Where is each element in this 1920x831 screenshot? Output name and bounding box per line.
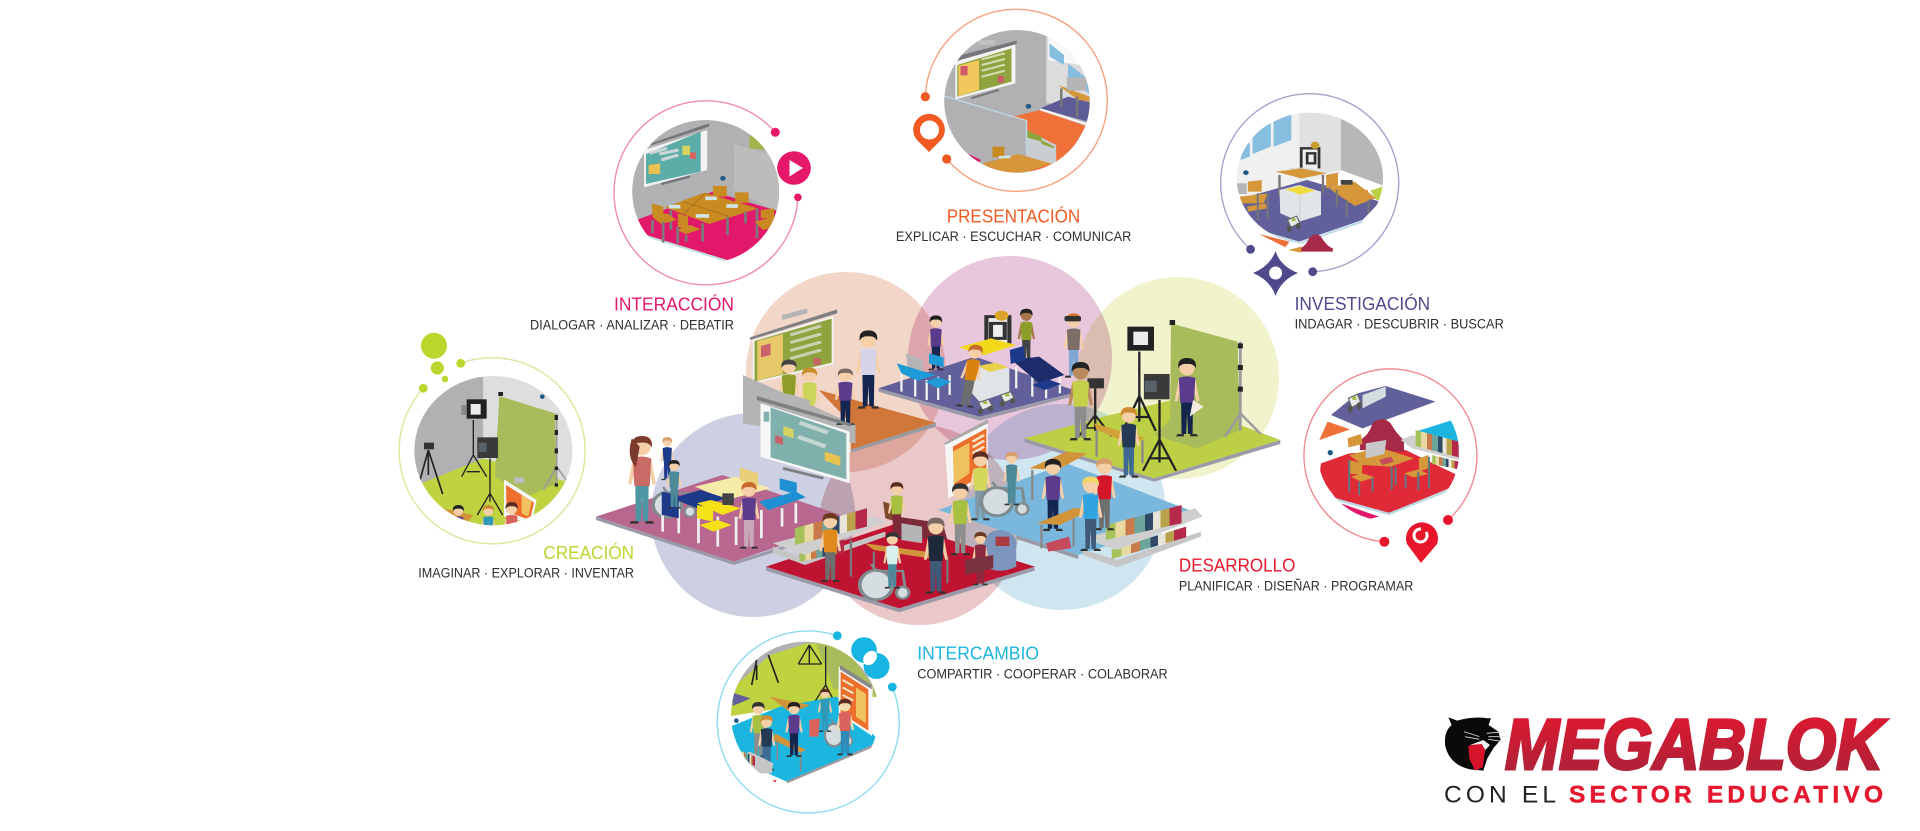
zone: intercambio platform [938,419,1202,567]
circle: intercambio [717,631,899,813]
logo: megablok [1444,706,1887,809]
ring with dots [717,631,899,813]
circle: creación [399,333,585,557]
illustration: investigación lab [1236,110,1386,253]
heading: interacción: INTERACCIÓN [614,294,734,315]
icon: star compass [1253,251,1298,296]
icon: panther head [1445,717,1505,771]
heading: presentación [896,205,1132,244]
heading: presentación: EXPLICAR · ESCUCHAR · COMUNICAR [896,229,1132,244]
tagline: SECTOR EDUCATIVO [1569,782,1883,809]
heading: desarrollo [1179,555,1414,594]
icon: bubbles [421,333,448,382]
ring with dots [614,101,802,285]
heading: intercambio [917,642,1168,681]
icon: play button [777,151,811,185]
circle: investigación [1221,94,1399,296]
heading: investigación: INDAGAR · DESCUBRIR · BUSCAR [1295,317,1504,332]
zone: presentación platform [596,436,856,565]
ring with dots [1304,369,1477,547]
illustration: interacción classroom [629,117,782,263]
icon: location pin [913,114,945,152]
heading: presentación: PRESENTACIÓN [947,205,1080,226]
zone: interacción platform [743,308,936,483]
zone: creación platform [1025,320,1280,482]
circle: desarrollo [1304,369,1477,563]
illustration: intercambio room [731,642,877,784]
heading: creación: IMAGINAR · EXPLORAR · INVENTAR [418,566,634,581]
illustration: desarrollo room [1319,386,1460,521]
central overlapping circles [651,256,1279,625]
ring with dots [399,358,585,544]
circle: interacción [614,101,811,285]
heading: creación [418,542,634,581]
icon: overlapping circles [851,637,890,679]
wordmark: MEGABLOK [1505,706,1887,785]
illustration: presentación room [944,30,1090,173]
zone: desarrollo platform [766,482,1035,612]
ring with dots [921,9,1107,191]
icon: refresh pin [1406,522,1438,563]
heading: intercambio: INTERCAMBIO [917,642,1039,663]
central isometric classroom scene [596,308,1280,612]
tagline: CON EL [1444,782,1556,809]
zone: investigación platform [878,309,1084,421]
heading: intercambio: COMPARTIR · COOPERAR · COLABORAR [917,666,1168,681]
circle: presentación [913,9,1107,191]
heading: desarrollo: PLANIFICAR · DISEÑAR · PROGRAMAR [1179,579,1414,594]
illustration: creación studio [414,376,572,526]
heading: interacción: DIALOGAR · ANALIZAR · DEBATIR [530,317,734,332]
heading: creación: CREACIÓN [543,542,634,563]
heading: investigación: INVESTIGACIÓN [1295,293,1430,314]
heading: interacción [530,294,734,332]
heading: desarrollo: DESARROLLO [1179,555,1295,576]
heading: investigación [1295,293,1504,332]
ring with dots [1221,94,1399,276]
